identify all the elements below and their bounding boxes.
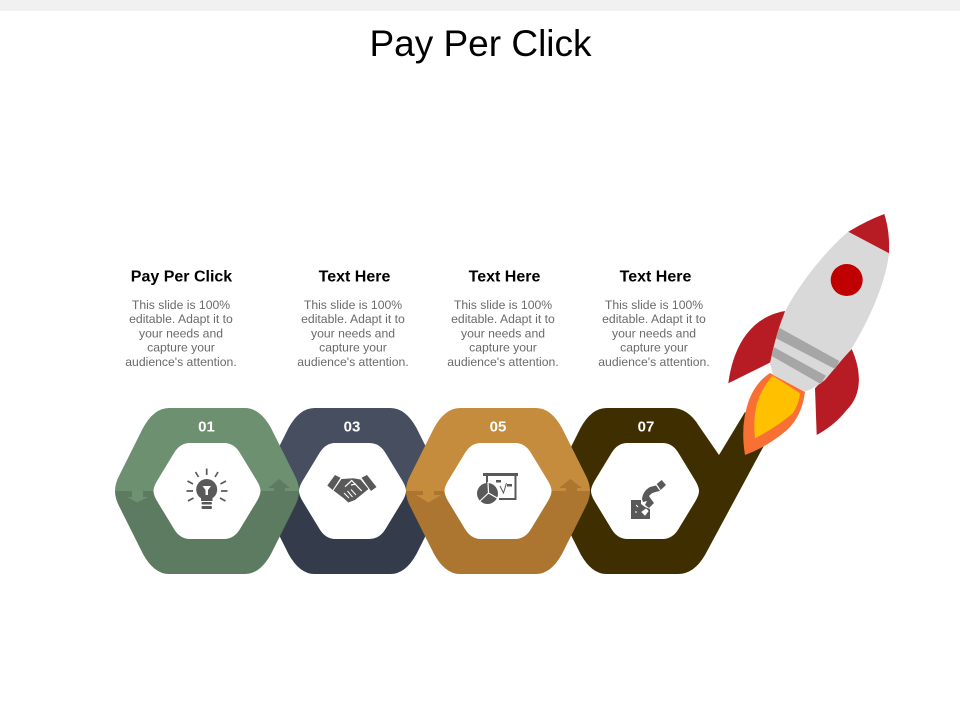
text block: Text Here 1 bbox=[297, 268, 409, 369]
text block: Text Here 3 bbox=[598, 268, 710, 369]
text block: Text Here 1: editable. Adapt it to bbox=[301, 312, 405, 326]
text block: Pay Per Click: capture your bbox=[147, 340, 215, 354]
left fin bbox=[728, 311, 785, 383]
text block: Text Here 2: Text Here bbox=[469, 268, 540, 286]
arrow: down bbox=[416, 491, 441, 502]
icon: handshake bbox=[327, 475, 376, 502]
text block: Pay Per Click: This slide is 100% bbox=[132, 298, 230, 312]
hexagon 07 with tail: dark brown bbox=[552, 408, 767, 574]
icon: hand placing puzzle piece bbox=[631, 480, 666, 519]
text block: Text Here 1: audience's attention. bbox=[297, 355, 409, 369]
text block: Pay Per Click: Pay Per Click bbox=[131, 268, 232, 286]
text block: Text Here 2 bbox=[447, 268, 559, 369]
right fin bbox=[815, 349, 859, 435]
text block: Pay Per Click: your needs and bbox=[139, 326, 223, 340]
body stripes bbox=[772, 328, 839, 384]
text block: Text Here 3: This slide is 100% bbox=[605, 298, 703, 312]
text block: Text Here 3: editable. Adapt it to bbox=[602, 312, 706, 326]
number 03: 03 bbox=[344, 418, 360, 436]
hexagon 05: amber bbox=[406, 408, 590, 574]
text block: Text Here 1: Text Here bbox=[319, 268, 390, 286]
window bbox=[831, 264, 863, 296]
arrow: up bbox=[559, 479, 582, 491]
text block: Text Here 2: editable. Adapt it to bbox=[451, 312, 555, 326]
text block: Text Here 3: audience's attention. bbox=[598, 355, 710, 369]
text block: Text Here 1: capture your bbox=[319, 340, 387, 354]
text block: Text Here 2: your needs and bbox=[461, 326, 545, 340]
text block: Pay Per Click: editable. Adapt it to bbox=[129, 312, 233, 326]
text block: Text Here 1: your needs and bbox=[311, 326, 395, 340]
arrow: down bbox=[127, 491, 148, 502]
icon: light bulb bbox=[186, 468, 228, 509]
text block: Text Here 3: Text Here bbox=[620, 268, 691, 286]
text block: Pay Per Click bbox=[125, 268, 237, 369]
number 07: 07 bbox=[638, 418, 654, 436]
number 01: 01 bbox=[198, 418, 215, 436]
flame outer bbox=[743, 373, 805, 455]
text block: Pay Per Click: audience's attention. bbox=[125, 355, 237, 369]
number 05: 05 bbox=[490, 418, 506, 436]
flame inner bbox=[754, 376, 800, 438]
rocket body bbox=[770, 232, 889, 392]
icon: presentation board with pie chart bbox=[477, 473, 518, 504]
text block: Text Here 2: audience's attention. bbox=[447, 355, 559, 369]
nose cone bbox=[848, 214, 889, 253]
arrow: up bbox=[268, 479, 290, 491]
text block: Text Here 2: capture your bbox=[469, 340, 537, 354]
text block: Text Here 1: This slide is 100% bbox=[304, 298, 402, 312]
hexagon 01: green bbox=[115, 408, 299, 574]
text block: Text Here 2: This slide is 100% bbox=[454, 298, 552, 312]
text block: Text Here 3: your needs and bbox=[612, 326, 696, 340]
text block: Text Here 3: capture your bbox=[620, 340, 688, 354]
hexagon 03: navy bbox=[260, 408, 444, 574]
title: Pay Per Click bbox=[369, 23, 592, 64]
rocket bbox=[728, 214, 889, 455]
